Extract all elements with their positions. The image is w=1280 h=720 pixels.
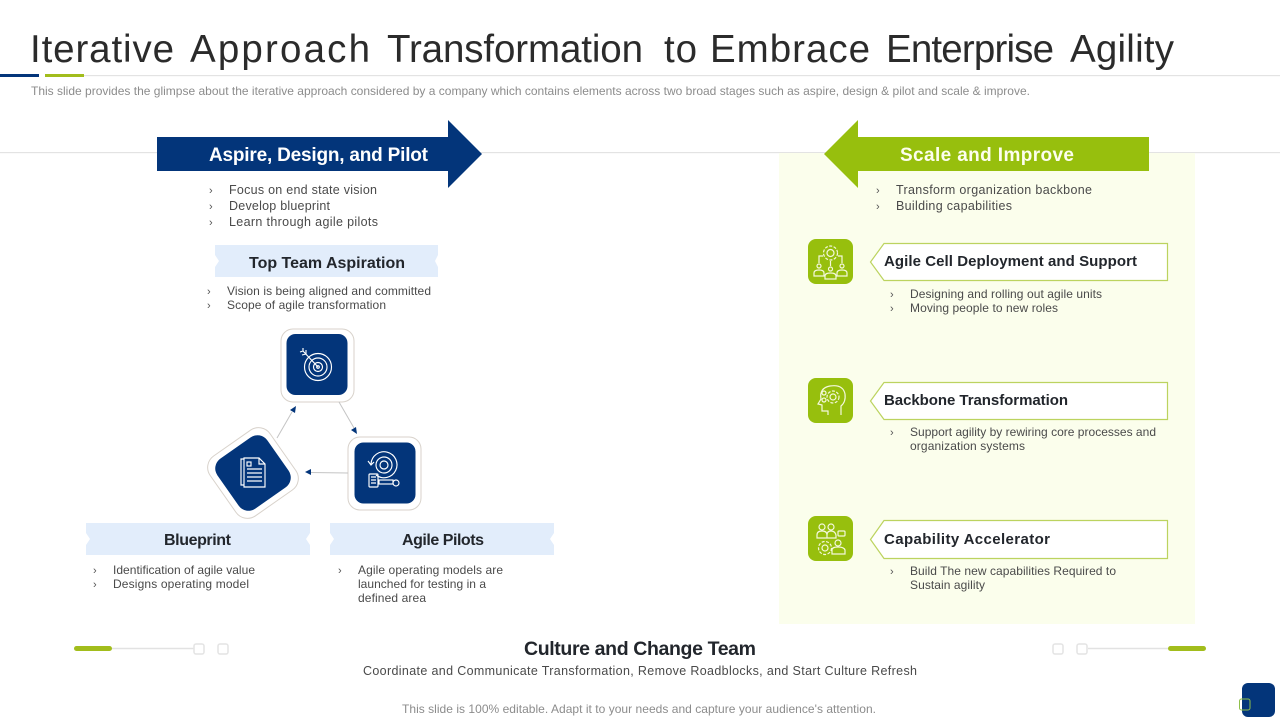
ribbon: blueprint [86,523,310,555]
card: backbone transformation [808,378,1168,453]
icon: head with gears [808,378,853,423]
ribbon: agile pilots: Agile Pilots [402,532,484,549]
arrow: scale and improve: Scale and Improve [900,145,1074,166]
list: › [890,427,894,439]
corner logo [1240,683,1275,717]
title: Iterative [30,28,174,71]
arrow: target to pilots [339,402,357,434]
list: aspire points: Focus on end state vision [229,183,377,197]
arrow: aspire, design, and pilot [157,120,482,188]
title: Embrace [710,28,870,71]
list: blueprint points: › [93,565,97,577]
label: Capability Accelerator [884,531,1050,548]
list: Support agility by rewiring core processes and [910,425,1156,439]
list: Moving people to new roles [910,301,1058,315]
list: agile pilots points: Agile operating models are [358,563,503,577]
label: Backbone Transformation [884,392,1068,409]
list: scale points: › [876,201,880,213]
subtitle: This slide provides the glimpse about the iterative approach considered by a company which contains elements across two broad stages such as aspire, design & pilot and scale & improve. [31,84,1030,98]
list [890,564,1116,592]
list: scale points: › [876,185,880,197]
list: organization systems [910,439,1025,453]
list: agile pilots points: launched for testing in a [358,577,486,591]
list: blueprint points: › [93,579,97,591]
title: to [664,28,697,71]
ribbon: blueprint: Blueprint [164,532,232,549]
icon: blueprint document [202,422,304,524]
ribbon: top team aspiration [215,245,438,277]
list: scale points: Transform organization backbone [896,183,1092,197]
ribbon: top team aspiration: Top Team Aspiration [249,255,405,272]
list: top team points [207,284,431,312]
list: blueprint points: Identification of agile value [113,563,255,577]
title: Agility [1070,28,1175,71]
footer decoration: right [1053,644,1206,654]
list: aspire points: › [209,185,213,197]
list: blueprint points: Designs operating model [113,577,249,591]
arrow: scale and improve [824,120,1149,188]
cycle diagram [202,329,421,524]
panel: scale and improve background [779,153,1195,624]
list: aspire points [209,183,378,229]
list: agile pilots points: › [338,565,342,577]
list: top team points: Scope of agile transformation [227,298,386,312]
title [30,28,1175,71]
list: aspire points: Develop blueprint [229,199,331,213]
list: Sustain agility [910,578,985,592]
list: scale points [876,183,1092,213]
label: Agile Cell Deployment and Support [884,253,1137,270]
list: aspire points: › [209,217,213,229]
list: top team points: › [207,300,211,312]
list: › [890,566,894,578]
footnote: This slide is 100% editable. Adapt it to your needs and capture your audience's attention. [402,702,876,716]
title accent bars [0,74,84,77]
icon: gear and people [808,239,853,284]
title: Transformation [387,28,643,71]
card: capability accelerator [808,516,1168,592]
list [890,425,1156,453]
list: Build The new capabilities Required to [910,564,1116,578]
list: Designing and rolling out agile units [910,287,1102,301]
card: agile cell deployment [808,239,1168,315]
list: aspire points: Learn through agile pilots [229,215,378,229]
title: Approach [190,28,370,71]
label [870,520,1168,558]
list: › [890,303,894,315]
arrow: blueprint to target [277,406,296,438]
list: top team points: › [207,286,211,298]
list [890,287,1102,315]
list: top team points: Vision is being aligned and committed [227,284,431,298]
text: culture description: Coordinate and Communicate Transformation, Remove Roadblocks, and Start Culture Refresh [363,664,917,678]
label [870,244,1168,280]
list: blueprint points [93,563,255,591]
arrow: pilots to blueprint [305,469,348,475]
icon: agile pilots target [348,437,421,510]
icon: team and gear [808,516,853,561]
list: scale points: Building capabilities [896,199,1012,213]
footer decoration: left [74,644,228,654]
list: agile pilots points [338,563,503,605]
list: aspire points: › [209,201,213,213]
arrow: aspire, design, and pilot: Aspire, Design, and Pilot [209,145,429,166]
title: Enterprise [886,28,1054,71]
heading: culture and change team: Culture and Change Team [524,638,756,660]
icon: target [281,329,354,402]
ribbon: agile pilots [330,523,554,555]
list: agile pilots points: defined area [358,591,426,605]
label [870,382,1168,420]
list: › [890,289,894,301]
